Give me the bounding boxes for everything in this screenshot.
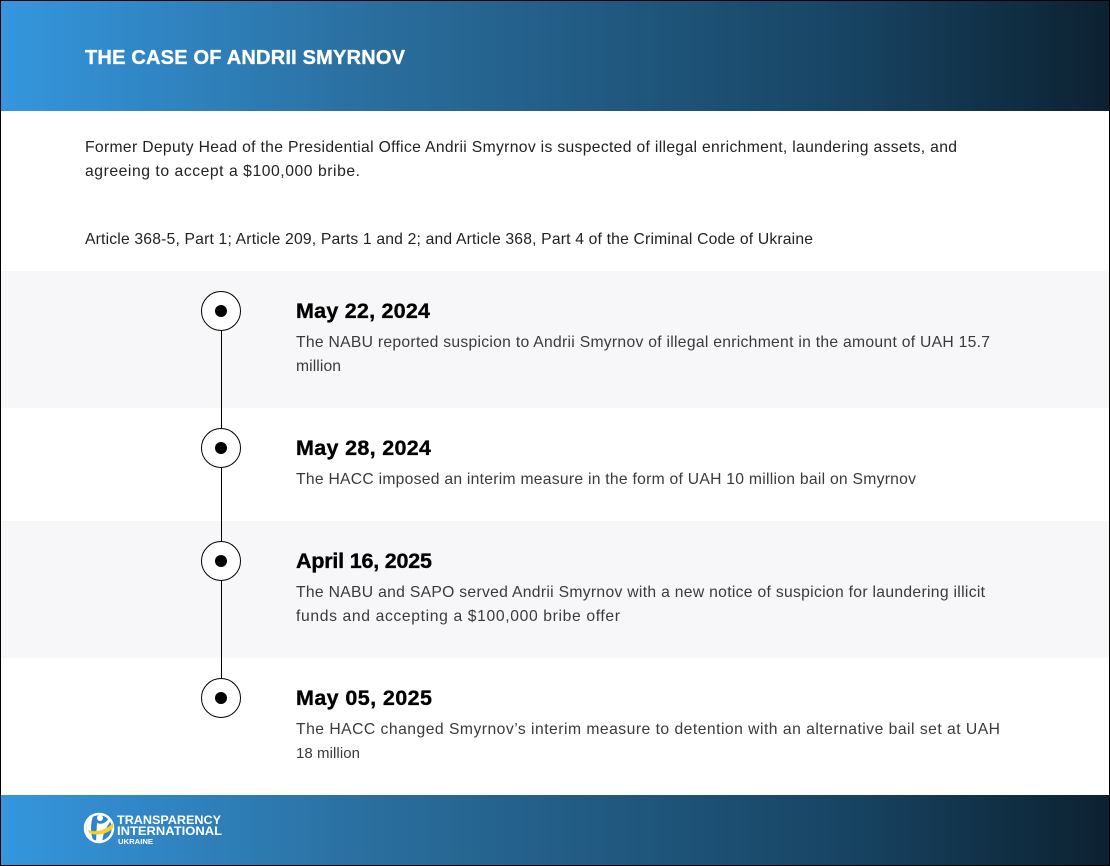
timeline marker 1	[202, 292, 240, 330]
event: May 28, 2024: The HACC imposed an interim measure in the form of UAH 10 million bail on Smyrnov	[296, 471, 916, 488]
title: THE CASE OF ANDRII SMYRNOV	[85, 47, 406, 69]
timeline line	[220, 311, 222, 698]
logo wordmark	[117, 813, 222, 846]
event: May 28, 2024	[296, 436, 916, 488]
intro text: agreeing to accept a $100,000 bribe.	[85, 163, 360, 180]
event: May 05, 2025: 18 million	[296, 745, 360, 762]
timeline marker 3	[202, 542, 240, 580]
event: April 16, 2025: The NABU and SAPO served Andrii Smyrnov with a new notice of suspicion for laundering illicit	[296, 584, 986, 601]
event: May 22, 2024: The NABU reported suspicion to Andrii Smyrnov of illegal enrichment in the amount of UAH 15.7	[296, 334, 990, 351]
legal articles: Article 368-5, Part 1; Article 209, Parts 1 and 2; and Article 368, Part 4 of the Criminal Code of Ukraine	[85, 231, 813, 248]
timeline marker 4	[202, 678, 240, 718]
event: May 28, 2024: May 28, 2024	[296, 436, 431, 460]
event: May 05, 2025: May 05, 2025	[296, 686, 432, 710]
logo wordmark: INTERNATIONAL	[117, 824, 222, 838]
logo wordmark: TRANSPARENCY	[117, 813, 221, 827]
timeline marker 2	[202, 428, 240, 468]
event: May 22, 2024: million	[296, 358, 341, 375]
logo wordmark: UKRAINE	[118, 839, 153, 846]
event: May 22, 2024: May 22, 2024	[296, 299, 430, 323]
intro text: Former Deputy Head of the Presidential Office Andrii Smyrnov is suspected of illegal enrichment, laundering assets, and	[85, 139, 957, 156]
event: April 16, 2025: funds and accepting a $100,000 bribe offer	[296, 608, 620, 625]
footer band	[0, 795, 1110, 866]
event: April 16, 2025: April 16, 2025	[296, 549, 432, 573]
icon: globe with figure	[85, 814, 114, 842]
header band	[0, 0, 1110, 111]
event: May 05, 2025	[296, 686, 1000, 762]
event: May 22, 2024	[296, 299, 990, 375]
event: April 16, 2025	[296, 549, 986, 625]
row background: April 16, 2025	[0, 521, 1110, 658]
row background: May 22, 2024	[0, 271, 1110, 408]
logo: Transparency International Ukraine	[85, 813, 222, 846]
event: May 05, 2025: The HACC changed Smyrnov’s interim measure to detention with an alternative bail set at UAH	[296, 721, 1000, 738]
intro text	[85, 139, 957, 180]
